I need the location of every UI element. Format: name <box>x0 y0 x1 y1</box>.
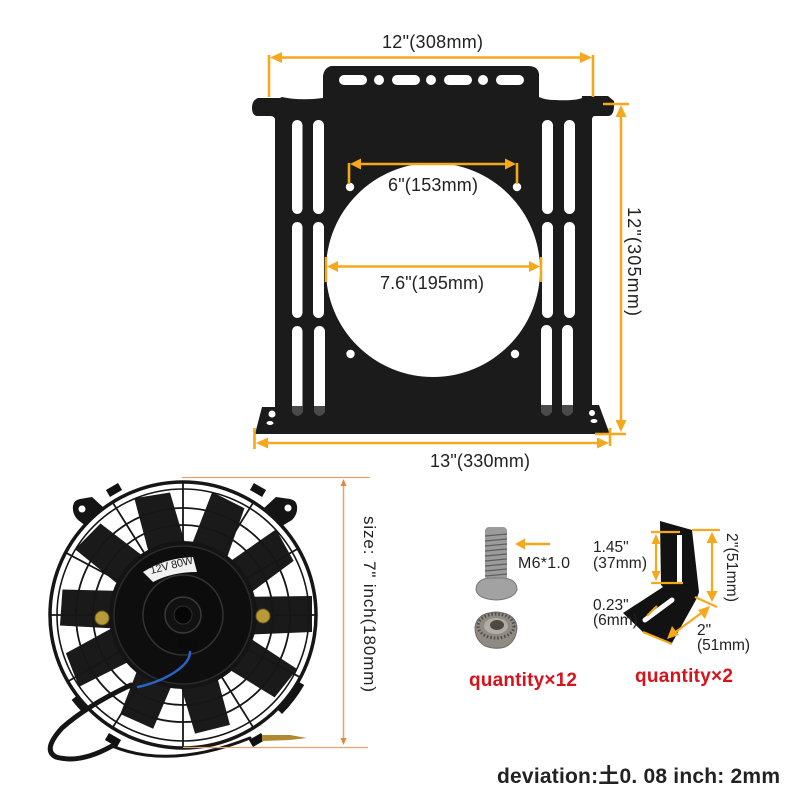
grille clips <box>105 483 266 747</box>
mounting bracket plate <box>252 66 614 434</box>
quantity 2 label: quantity×2 <box>635 666 733 687</box>
dimension: fan hole 7.6 inch: 7.6"(195mm) <box>380 273 484 293</box>
label: 12V 80W: 12V 80W <box>149 554 195 577</box>
deviation note: deviation:土0. 08 inch: 2mm <box>497 765 780 788</box>
side slots <box>292 120 575 414</box>
mounting holes <box>266 183 598 425</box>
bolt <box>476 527 517 600</box>
fan blades <box>60 489 312 734</box>
quantity 12 label: quantity×12 <box>469 670 577 691</box>
dimension: bottom width 13 inch: 13"(330mm) <box>430 451 530 471</box>
dimension: fan hole 7.6 inch <box>326 257 541 293</box>
mounting lobe holes <box>78 504 292 512</box>
dimension: hole spacing 6 inch <box>349 158 517 195</box>
thread size callout <box>515 538 570 572</box>
bracket dimension labels <box>593 533 750 654</box>
dimension: height 12 inch: 12"(305mm) <box>624 207 644 316</box>
bracket dimension labels: 2"(51mm) <box>723 533 740 602</box>
flange nut <box>475 612 517 648</box>
spade terminal <box>262 735 307 741</box>
dimension: hole spacing 6 inch: 6"(153mm) <box>388 175 478 195</box>
dimension: fan size <box>182 478 379 748</box>
fan grille <box>50 482 316 748</box>
dimension: height 12 inch <box>595 104 644 434</box>
dimension: bottom width 13 inch <box>254 428 610 471</box>
bracket dimension labels: 0.23" <box>593 597 629 614</box>
cooling fan <box>50 482 316 759</box>
motor housing <box>109 541 257 689</box>
label: 12V 80W <box>143 554 197 582</box>
bracket dimension labels: (6mm) <box>593 612 638 629</box>
thread size callout: M6*1.0 <box>518 555 570 572</box>
bracket dimension labels: (37mm) <box>593 555 647 572</box>
top tab slots <box>339 75 524 85</box>
mounting lobes <box>73 497 302 712</box>
brass screws <box>95 609 270 625</box>
bracket dimension labels: 2" <box>697 622 711 639</box>
power cable <box>50 643 250 759</box>
bracket dimension labels: (51mm) <box>697 637 750 654</box>
dimension: fan size: size: 7" inch(180mm) <box>360 516 379 692</box>
L bracket <box>623 521 699 643</box>
dimension: top width 12 inch <box>269 32 593 97</box>
dimension: top width 12 inch: 12"(308mm) <box>382 32 483 52</box>
bracket dimensions <box>593 530 750 654</box>
slot shadows at flange fold <box>292 405 573 416</box>
bracket dimension labels: 1.45" <box>593 539 629 556</box>
